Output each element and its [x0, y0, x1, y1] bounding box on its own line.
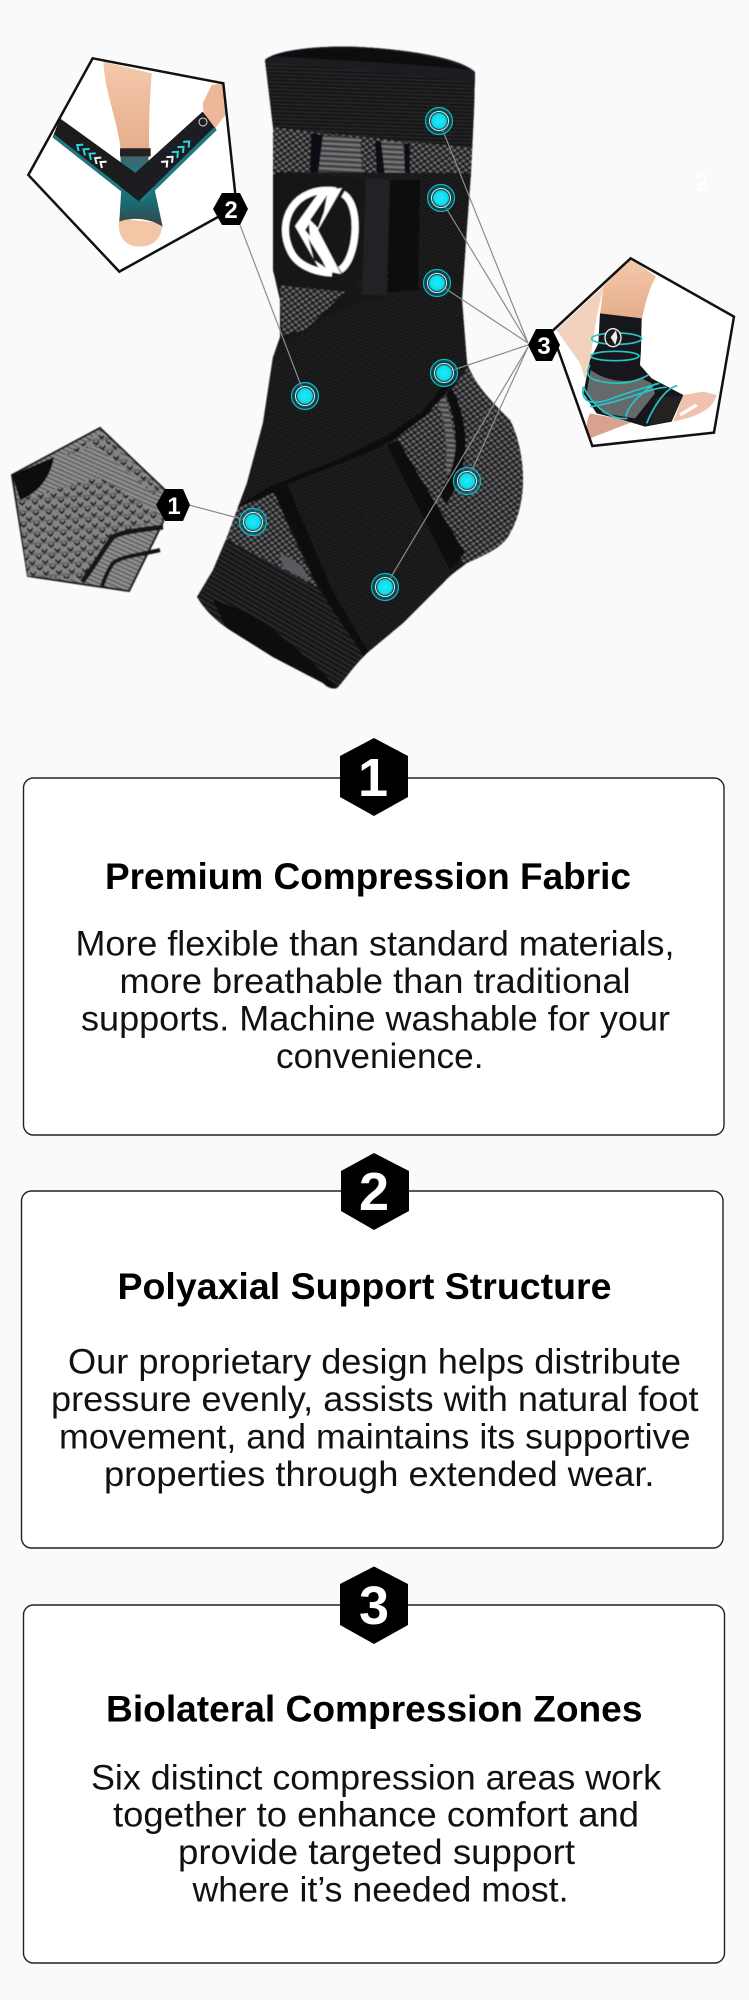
small hex badge 1 — [156, 489, 190, 521]
leg — [103, 62, 152, 150]
callout lines — [189, 121, 528, 587]
ankle wrap strap — [228, 284, 470, 512]
body text: More flexible than standard materials, — [76, 924, 674, 964]
body text: Our proprietary design helps distribute — [68, 1342, 681, 1382]
marker — [430, 360, 458, 386]
body text: convenience. — [276, 1037, 484, 1076]
top cuff ribbing — [264, 46, 476, 150]
body text: provide targeted support — [178, 1833, 575, 1872]
sock body — [190, 40, 530, 700]
marker — [426, 108, 452, 134]
small hex badge 2 — [213, 193, 248, 225]
sock on foot — [119, 148, 163, 227]
toe opening — [213, 600, 338, 690]
badge 3: 3 — [359, 1576, 389, 1636]
badge 2: 2 — [359, 1162, 389, 1222]
body text: where it’s needed most. — [191, 1870, 568, 1910]
small hex badge 3: 3 — [537, 333, 551, 360]
marker — [424, 270, 450, 296]
strap chevrons — [75, 139, 192, 168]
grey knit below strap — [280, 285, 345, 335]
hotspot markers — [240, 108, 480, 600]
body text: more breathable than traditional — [120, 962, 630, 1001]
strap logo — [199, 118, 207, 126]
top rim and inner lining — [262, 45, 478, 84]
inset: fabric swatch — [12, 428, 165, 591]
body text — [76, 924, 674, 1076]
teal rings — [583, 333, 677, 423]
ankle brace product photo — [190, 40, 530, 700]
marker — [454, 468, 480, 494]
marker — [372, 574, 398, 600]
upper strap with velcro panel — [273, 172, 472, 297]
inset: strap pull — [28, 58, 237, 272]
body text: Six distinct compression areas work — [91, 1758, 662, 1798]
front leg — [600, 258, 656, 320]
panel: premium compression fabric — [24, 738, 724, 1135]
body text — [51, 1342, 699, 1494]
body text: supports. Machine washable for your — [81, 1000, 670, 1038]
heading: Biolateral Compression Zones — [106, 1688, 642, 1730]
straps — [53, 118, 138, 192]
badge 3 — [340, 1566, 408, 1644]
toe ribbed band — [198, 539, 363, 689]
inset: compression zones — [552, 258, 734, 446]
small hex badge 1: 1 — [167, 493, 181, 520]
badge 2 — [341, 1153, 409, 1230]
left forefoot grey knit — [222, 490, 317, 587]
faint ghost number: 2 — [695, 170, 709, 197]
lower strap — [287, 445, 454, 652]
small hex badge 2: 2 — [224, 197, 238, 224]
hand — [203, 83, 227, 128]
small hex badge 3 — [528, 329, 560, 361]
body text: pressure evenly, assists with natural foot — [51, 1380, 699, 1419]
heading: Polyaxial Support Structure — [118, 1266, 612, 1307]
brace — [583, 313, 683, 427]
mini logo — [605, 329, 621, 347]
marker — [292, 382, 318, 410]
badge 1 — [340, 738, 408, 816]
heading: Premium Compression Fabric — [105, 856, 631, 897]
heel and foot — [587, 413, 633, 438]
panel: biolateral compression zones — [24, 1566, 724, 1963]
marker — [428, 184, 454, 212]
body text: movement, and maintains its supportive — [59, 1418, 690, 1456]
body text: together to enhance comfort and — [113, 1796, 639, 1834]
grey knit band — [270, 127, 476, 176]
marker — [240, 508, 266, 536]
heel grey knit — [385, 355, 530, 570]
body text — [91, 1758, 662, 1910]
rear leg — [557, 287, 603, 383]
foot — [119, 218, 162, 247]
logo: circle mark — [285, 188, 355, 274]
badge 1: 1 — [358, 748, 388, 808]
body text: properties through extended wear. — [104, 1455, 654, 1494]
panel: polyaxial support structure — [22, 1153, 723, 1548]
